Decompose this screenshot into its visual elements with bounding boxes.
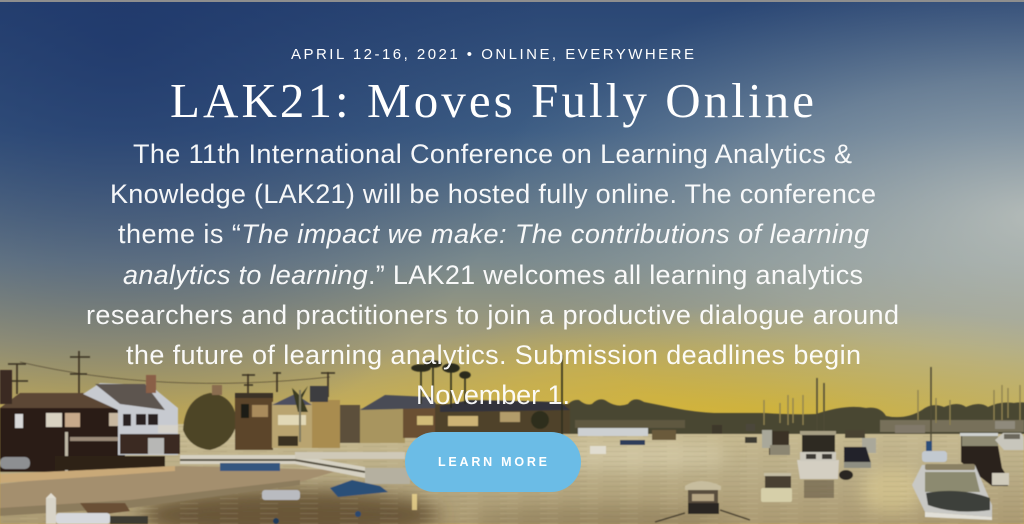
- harbor photo scene: [0, 351, 1024, 524]
- small moored boats left: [46, 480, 388, 524]
- distant masts: [764, 385, 1020, 425]
- description paragraph: November 1.: [416, 380, 570, 410]
- description paragraph: [86, 139, 899, 410]
- water channel: [0, 424, 1024, 524]
- main title: LAK21: Moves Fully Online: [170, 73, 814, 128]
- far shoreline trees: [565, 399, 1024, 434]
- dark shingle house: [0, 370, 128, 474]
- green tree: [183, 393, 237, 450]
- boat: white speedboat far right: [995, 433, 1024, 450]
- palm trees: [412, 355, 562, 445]
- marina near button: [578, 428, 676, 454]
- tan houses row: [272, 386, 340, 448]
- learn more button: LEARN MORE: [438, 455, 547, 469]
- boat: small far boats: [712, 421, 1015, 455]
- description paragraph: theme is “The impact we make: The contributions of learning: [118, 219, 869, 249]
- hedge and wall: [55, 456, 165, 470]
- white footbridge: [180, 452, 410, 484]
- boat: small sailboat: [922, 441, 947, 462]
- boat: large foreground cruiser: [912, 464, 992, 520]
- boat: navy covered boat: [844, 447, 871, 468]
- distant houses: [340, 395, 570, 443]
- utility poles: [8, 351, 335, 403]
- description paragraph: researchers and practitioners to join a productive dialogue around: [86, 300, 899, 330]
- boat: duffy with canopy: [655, 481, 750, 522]
- description paragraph: The 11th International Conference on Learning Analytics &: [133, 139, 852, 169]
- description paragraph: analytics to learning.” LAK21 welcomes all learning analytics: [123, 260, 863, 290]
- date and location line: APRIL 12-16, 2021 • ONLINE, EVERYWHERE: [291, 46, 694, 63]
- boat: dark cruiser right: [960, 433, 1009, 486]
- brown house: [212, 385, 273, 450]
- description paragraph: the future of learning analytics. Submission deadlines begin: [126, 340, 861, 370]
- learn more button: [405, 432, 581, 492]
- masts: [817, 367, 931, 451]
- boat: large cabin cruiser: [797, 431, 853, 498]
- boat: open launch: [761, 473, 792, 502]
- beach and seawall: [0, 466, 340, 516]
- description paragraph: Knowledge (LAK21) will be hosted fully online. The conference: [110, 179, 876, 209]
- white house: [83, 375, 180, 455]
